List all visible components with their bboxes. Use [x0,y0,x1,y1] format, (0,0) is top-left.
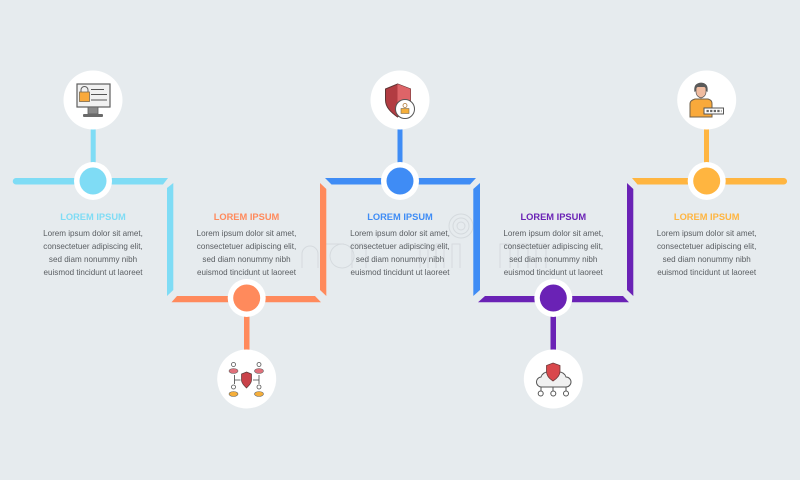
icon: monitor with padlock [64,70,122,130]
text block 3: sed diam nonummy nibh [356,255,444,264]
text block 4: consectetuer adipiscing elit, [504,242,603,251]
text block 5 [657,212,757,277]
text block 5: Lorem ipsum dolor sit amet, [657,229,757,238]
text block 3: Lorem ipsum dolor sit amet, [350,229,450,238]
node 3 [381,162,419,200]
text block 1 [43,212,143,277]
step 4: purple connector [478,183,633,355]
text block 3: LOREM IPSUM [367,212,433,222]
node 2 [228,279,266,317]
text block 4 [503,212,604,277]
text block 2: sed diam nonummy nibh [202,255,291,264]
node 1 [74,162,112,200]
step 2: orange connector [172,183,326,355]
icon: shield on cloud network [524,350,583,408]
text block 1: euismod tincidunt ut laoreet [44,268,143,277]
step 3: blue connector [325,125,480,296]
text block 3: consectetuer adipiscing elit, [350,242,450,251]
text block 2: euismod tincidunt ut laoreet [197,268,297,277]
text block 5: euismod tincidunt ut laoreet [657,268,757,277]
text block 3 [350,212,450,277]
node 4 [534,279,572,317]
text block 1: consectetuer adipiscing elit, [43,242,143,251]
text block 4: sed diam nonummy nibh [509,255,597,264]
text block 5: LOREM IPSUM [674,212,740,222]
text block 1: sed diam nonummy nibh [49,255,137,264]
icon: shield with user badge [370,70,430,130]
text block 2: consectetuer adipiscing elit, [197,242,296,251]
text block 4: LOREM IPSUM [520,212,586,222]
icon: people and shield [217,350,276,408]
text block 1: Lorem ipsum dolor sit amet, [43,229,143,238]
text block 1: LOREM IPSUM [60,212,126,222]
text block 2: Lorem ipsum dolor sit amet, [197,229,296,238]
step 5: yellow connector [632,125,787,184]
text block 4: Lorem ipsum dolor sit amet, [503,229,603,238]
step 1: cyan connector [13,125,173,296]
text block 5: consectetuer adipiscing elit, [657,242,756,251]
text block 4: euismod tincidunt ut laoreet [504,268,604,277]
node 5 [688,162,726,200]
text block 5: sed diam nonummy nibh [663,255,751,264]
icon: user with password [677,70,736,130]
text block 2: LOREM IPSUM [214,212,280,222]
text block 2 [197,212,297,277]
text block 3: euismod tincidunt ut laoreet [351,268,450,277]
